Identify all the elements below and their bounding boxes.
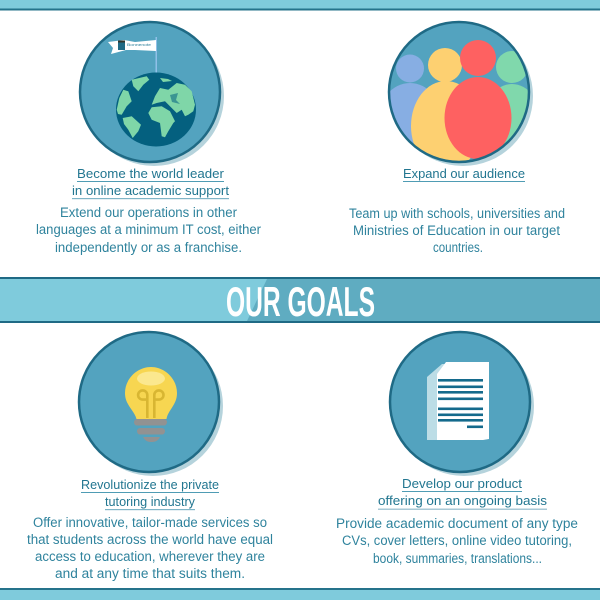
top band <box>0 0 600 10</box>
bottom band <box>0 588 600 600</box>
icon: people <box>388 20 533 166</box>
body: world leader: Extend our operations in other <box>60 205 237 220</box>
icon: document <box>390 332 534 476</box>
heading: product <box>378 476 548 510</box>
heading: audience: Expand our audience <box>403 166 525 181</box>
body: revolutionize <box>27 515 273 581</box>
heading: world leader <box>72 166 229 199</box>
banner: our goals <box>0 277 600 325</box>
body: world leader <box>36 205 261 255</box>
heading: revolutionize: Revolutionize the private <box>81 477 219 492</box>
body: product: CVs, cover letters, online video tutoring, <box>342 533 572 548</box>
heading: revolutionize: tutoring industry <box>105 494 195 509</box>
body: product: Provide academic document of any type <box>336 516 578 531</box>
icon: light bulb <box>79 332 223 476</box>
icon: globe with flag <box>80 22 224 166</box>
panel: world leader <box>36 22 261 255</box>
body: world leader: languages at a minimum IT cost, either <box>36 222 261 237</box>
body: revolutionize: Offer innovative, tailor-made services so <box>33 515 267 530</box>
panel: audience <box>349 22 565 255</box>
heading: revolutionize <box>81 477 219 510</box>
body: audience <box>349 206 565 255</box>
heading: product: Develop our product <box>402 476 522 491</box>
body: product <box>336 516 578 566</box>
body: audience: countries. <box>433 240 483 255</box>
body: audience: Team up with schools, universities and <box>349 206 565 221</box>
body: world leader: independently or as a franchise. <box>55 240 242 255</box>
body: revolutionize: that students across the world have equal <box>27 532 273 547</box>
heading: world leader: in online academic support <box>72 183 229 198</box>
body: revolutionize: and at any time that suits them. <box>55 566 245 581</box>
body: revolutionize: access to education, wherever they are <box>35 549 265 564</box>
body: audience: Ministries of Education in our target <box>353 223 560 238</box>
icon: globe with flag: Bonnenote <box>127 42 152 47</box>
panel: revolutionize <box>27 332 273 581</box>
heading: product: offering on an ongoing basis <box>378 493 548 508</box>
heading: world leader: Become the world leader <box>77 166 225 181</box>
title: OUR GOALS <box>226 278 375 325</box>
panel: product <box>336 332 578 566</box>
body: product: book, summaries, translations... <box>373 551 542 566</box>
